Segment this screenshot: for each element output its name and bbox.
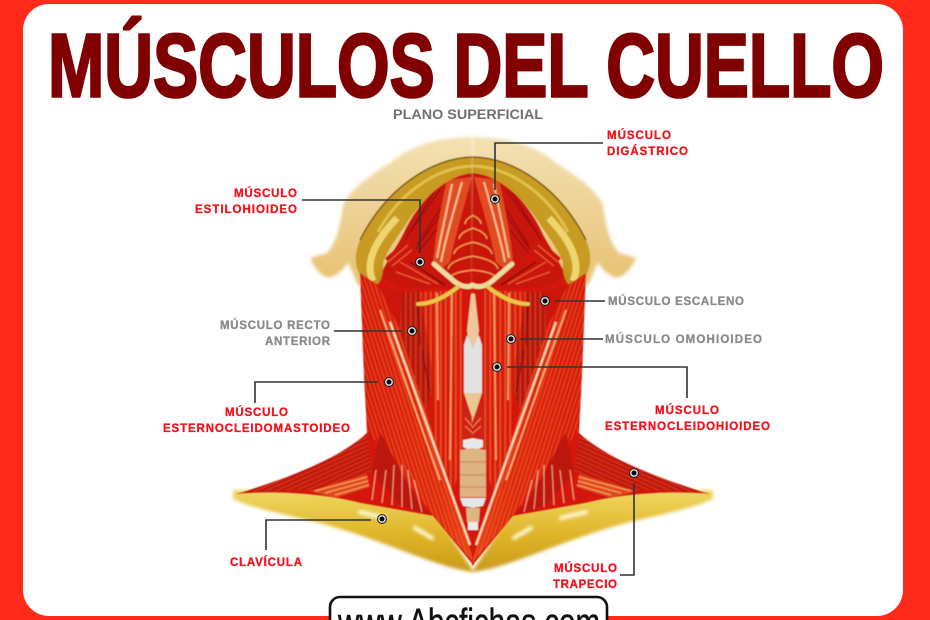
label: músculo esternocleidohioideo: MÚSCULO xyxy=(655,404,719,417)
label: músculo recto anterior xyxy=(220,319,331,348)
illustration: neck muscles xyxy=(233,137,713,572)
label: músculo estilohioideo xyxy=(195,187,297,216)
label: músculo esternocleidomastoideo xyxy=(163,406,350,435)
label: músculo digástrico xyxy=(607,129,688,158)
subtitle: PLANO SUPERFICIAL xyxy=(393,107,543,122)
label: músculo esternocleidomastoideo: ESTERNOCLEIDOMASTOIDEO xyxy=(163,423,350,435)
label: músculo digástrico: DIGÁSTRICO xyxy=(607,145,688,158)
label: músculo estilohioideo: ESTILOHIOIDEO xyxy=(195,204,297,216)
label: músculo recto anterior: MÚSCULO RECTO xyxy=(220,319,330,332)
leader lines xyxy=(255,143,687,575)
label: músculo estilohioideo: MÚSCULO xyxy=(234,187,297,200)
website badge xyxy=(330,597,607,620)
label: músculo escaleno: MÚSCULO ESCALENO xyxy=(608,295,744,308)
label: clavícula: CLAVÍCULA xyxy=(230,556,302,569)
label: músculo esternocleidohioideo xyxy=(605,404,770,433)
label: músculo esternocleidohioideo: ESTERNOCLEIDOHIOIDEO xyxy=(605,421,770,433)
label: músculo omohioideo: MÚSCULO OMOHIOIDEO xyxy=(605,333,762,346)
label: músculo recto anterior: ANTERIOR xyxy=(265,336,331,348)
label: músculo trapecio: MÚSCULO xyxy=(554,562,617,575)
label: músculo trapecio xyxy=(553,562,617,591)
label: músculo digástrico: MÚSCULO xyxy=(607,129,671,142)
marker dots xyxy=(377,194,639,524)
label: músculo trapecio: TRAPECIO xyxy=(553,579,617,591)
label: músculo esternocleidomastoideo: MÚSCULO xyxy=(225,406,288,419)
